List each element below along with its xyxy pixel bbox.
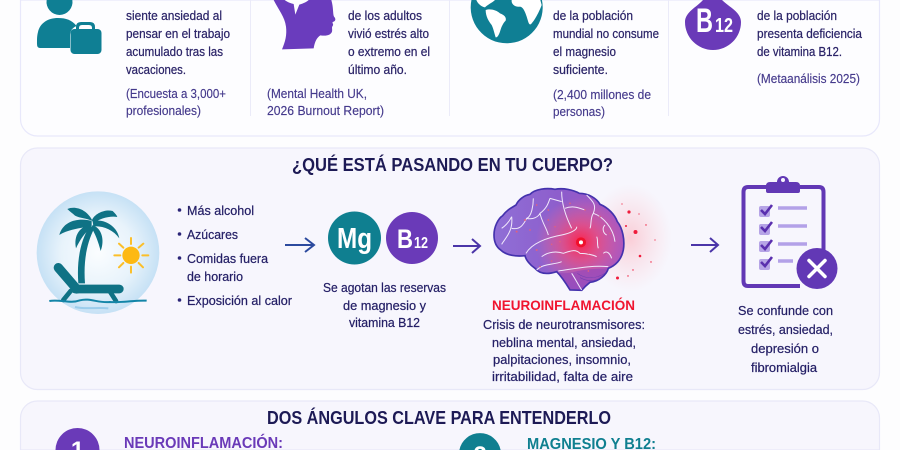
text: statistic one: vacaciones. [126, 63, 186, 77]
arrow: triggers to depletion [285, 238, 314, 252]
text: neurotransmitter crisis [483, 318, 645, 384]
icon: vitamin B12: 12 [414, 235, 428, 252]
badge: number two [459, 433, 501, 450]
icon: clipboard with cross [744, 176, 838, 289]
icon: magnesium [328, 212, 381, 264]
text: reserves depleted: Se agotan las reservas [323, 281, 446, 295]
text: statistic three [553, 9, 659, 119]
text: statistic two: de los adultos [348, 9, 422, 23]
heading: body: ¿QUÉ ESTÁ PASANDO EN TU CUERPO? [292, 154, 613, 175]
list: triggers: Comidas fuera [187, 252, 268, 266]
arrow: depletion to brain [453, 239, 480, 253]
text: statistic two: vivió estrés alto [348, 27, 429, 41]
text: statistic four: de vitamina B12. [757, 45, 842, 59]
text: reserves depleted: de magnesio y [343, 299, 427, 313]
text: statistic two: 2026 Burnout Report) [267, 104, 384, 118]
text: reserves depleted: vitamina B12 [349, 316, 420, 330]
list: triggers: Más alcohol [187, 204, 254, 218]
text: neurotransmitter crisis: neblina mental, ansiedad, [492, 336, 636, 350]
text: confused with: fibromialgia [751, 361, 817, 375]
text: statistic three: mundial no consume [553, 27, 659, 41]
icon: B12 drop: 12 [715, 15, 733, 37]
text: statistic three: de la población [553, 9, 633, 23]
text: statistic three: suficiente. [553, 63, 608, 77]
text: statistic four: (Metaanálisis 2025) [757, 72, 860, 86]
icon: sun [114, 238, 148, 273]
text: statistic two: último año. [348, 63, 407, 77]
icon: beach scene [37, 191, 159, 314]
text: statistic three: personas) [553, 105, 605, 119]
text: neurotransmitter crisis: palpitaciones, insomnio, [493, 353, 631, 367]
icon: magnesium: Mg [337, 223, 372, 255]
panel: statistics [20, 0, 880, 136]
text: statistic one [126, 9, 230, 118]
icon: B12 drop [685, 0, 741, 50]
list: triggers: Exposición al calor [187, 294, 292, 308]
icon: globe [471, 0, 543, 43]
text: statistic four [757, 9, 862, 86]
text: confused with: estrés, ansiedad, [738, 323, 833, 337]
icon: B12 drop: B [696, 2, 713, 40]
text: statistic three: (2,400 millones de [553, 88, 651, 102]
heading: neuroinflammation: NEUROINFLAMACIÓN [492, 296, 635, 313]
text: statistic one: (Encuesta a 3,000+ [126, 87, 226, 101]
text: confused with: depresión o [751, 342, 819, 356]
heading: angles: DOS ÁNGULOS CLAVE PARA ENTENDERLO [267, 407, 611, 428]
text: statistic one: acumulado tras las [126, 45, 223, 59]
list: triggers: de horario [187, 270, 243, 284]
text: statistic two [267, 9, 430, 118]
text: statistic two: o extremo en el [348, 45, 430, 59]
panel: two key angles [20, 401, 880, 450]
text: statistic two: (Mental Health UK, [267, 87, 367, 101]
text: statistic one: siente ansiedad al [126, 9, 222, 23]
text: statistic one: profesionales) [126, 104, 201, 118]
panel: what is happening in your body [20, 148, 880, 390]
text: confused with: Se confunde con [738, 304, 833, 318]
text: statistic one: pensar en el trabajo [126, 27, 230, 41]
badge: number one [56, 428, 100, 450]
icon: vitamin B12: B [397, 224, 413, 254]
icon: inflamed brain [493, 188, 660, 292]
icon: head silhouette [274, 0, 335, 49]
text: reserves depleted [323, 281, 446, 330]
list: triggers [178, 204, 292, 308]
icon: vitamin B12 [386, 212, 438, 264]
text: statistic three: el magnesio [553, 45, 616, 59]
text: statistic four: presenta deficiencia [757, 27, 862, 41]
text: neurotransmitter crisis: irritabilidad, falta de aire [492, 370, 633, 384]
list: triggers: Azúcares [187, 228, 238, 242]
text: confused with [738, 304, 833, 375]
text: statistic four: de la población [757, 9, 837, 23]
icon: worker with briefcase [37, 0, 102, 54]
text: neurotransmitter crisis: Crisis de neurotransmisores: [483, 318, 645, 332]
arrow: brain to misdiagnosis [691, 238, 718, 252]
